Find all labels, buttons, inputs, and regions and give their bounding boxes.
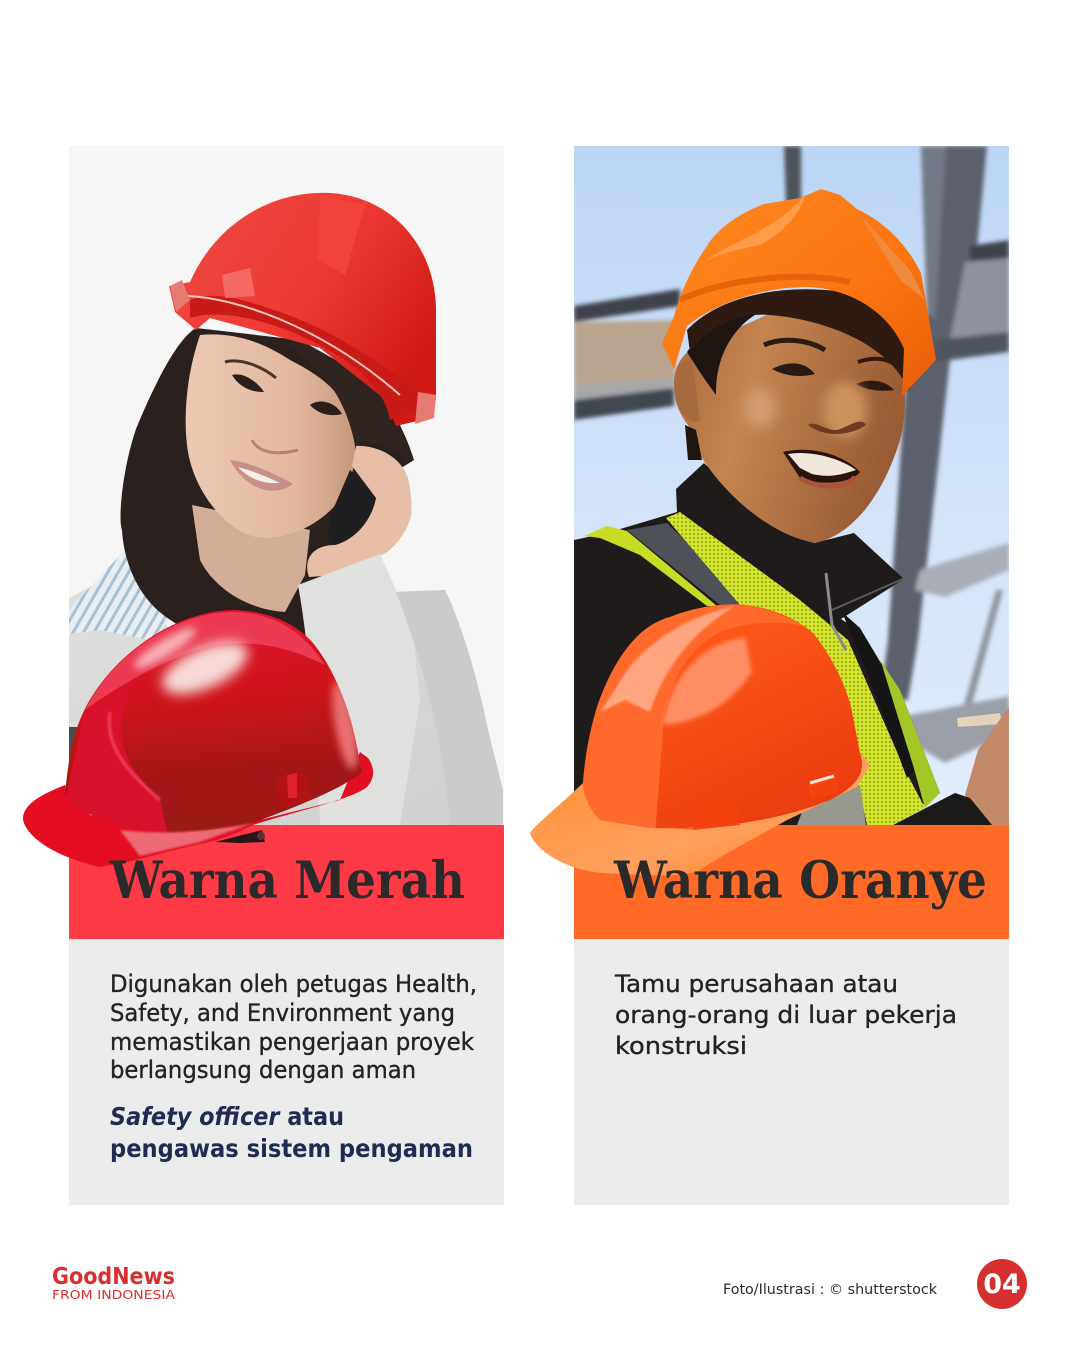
description text bbox=[110, 970, 477, 1084]
card background bbox=[69, 146, 504, 1205]
neck and face bbox=[674, 300, 905, 543]
red helmet on head bbox=[169, 193, 436, 426]
face bbox=[186, 334, 355, 538]
hair bbox=[685, 312, 760, 460]
blazer bbox=[69, 572, 503, 825]
icon: red hard hat bbox=[23, 605, 373, 867]
vest side strap bbox=[584, 526, 717, 606]
vest right panel bbox=[867, 640, 940, 808]
vest mesh strap bbox=[666, 512, 925, 825]
fringe bbox=[308, 344, 412, 462]
steel structure bbox=[574, 146, 1009, 763]
page number badge: 04 bbox=[983, 1269, 1021, 1300]
heading: warna merah: Warna Merah bbox=[109, 851, 465, 911]
description text: Tamu perusahaan atau bbox=[614, 970, 898, 998]
logo: goodnews from indonesia: FROM INDONESIA bbox=[52, 1288, 176, 1302]
description text: orang-orang di luar pekerja bbox=[615, 1001, 957, 1029]
photo credit: Foto/Ilustrasi : © shutterstock bbox=[723, 1282, 938, 1298]
description text: memastikan pengerjaan proyek bbox=[110, 1028, 474, 1056]
woman's eyes, brows, nose, lips bbox=[225, 361, 342, 491]
sleeve bbox=[298, 554, 420, 825]
dark jacket bbox=[574, 463, 940, 825]
photo: woman in red helmet on the phone bbox=[69, 146, 504, 825]
zipper bbox=[826, 573, 846, 650]
role text bbox=[110, 1102, 473, 1163]
ear bbox=[675, 360, 700, 422]
icon: orange hard hat bbox=[530, 600, 875, 875]
hair bbox=[121, 328, 414, 640]
striped shirt bbox=[69, 550, 170, 640]
shadow under helmet bbox=[687, 289, 910, 390]
pale left highlight band bbox=[600, 606, 735, 712]
colour band bbox=[574, 825, 1009, 939]
page number badge bbox=[977, 1259, 1027, 1309]
photo: man in orange helmet and safety vest bbox=[574, 146, 1009, 825]
heading: warna oranye: Warna Oranye bbox=[613, 851, 987, 911]
zipper strip bbox=[842, 612, 914, 778]
hand bbox=[307, 446, 412, 577]
logo: goodnews from indonesia: GoodNews bbox=[52, 1264, 175, 1290]
role text: Safety officer atau bbox=[110, 1102, 344, 1131]
right edge sheen bbox=[327, 679, 363, 771]
description text: Digunakan oleh petugas Health, bbox=[110, 970, 477, 998]
left outer panel bbox=[583, 604, 804, 828]
role text: pengawas sistem pengaman bbox=[110, 1134, 473, 1163]
description text: Safety, and Environment yang bbox=[110, 999, 455, 1027]
inner panel highlight bbox=[663, 637, 752, 725]
description text: konstruksi bbox=[615, 1032, 747, 1060]
description text: berlangsung dengan aman bbox=[110, 1056, 416, 1084]
panel: warna oranye bbox=[574, 146, 1009, 1205]
logo: goodnews from indonesia bbox=[52, 1264, 176, 1302]
vest grey reflective strap bbox=[627, 523, 740, 605]
left panel bbox=[65, 680, 168, 835]
card background bbox=[574, 146, 1009, 1205]
phone bbox=[329, 470, 378, 544]
colour band bbox=[69, 825, 504, 939]
neck bbox=[192, 505, 310, 612]
pen bbox=[957, 713, 1002, 727]
vest lower reflective panel bbox=[797, 785, 866, 825]
man's eyes, brows, nose, mouth bbox=[744, 340, 902, 486]
panel: warna merah bbox=[69, 146, 504, 1205]
top ridge band bbox=[85, 612, 325, 710]
hand and arm bbox=[965, 707, 1009, 825]
central highlight bbox=[155, 631, 255, 705]
description text bbox=[614, 970, 957, 1060]
orange helmet on head bbox=[662, 189, 936, 396]
